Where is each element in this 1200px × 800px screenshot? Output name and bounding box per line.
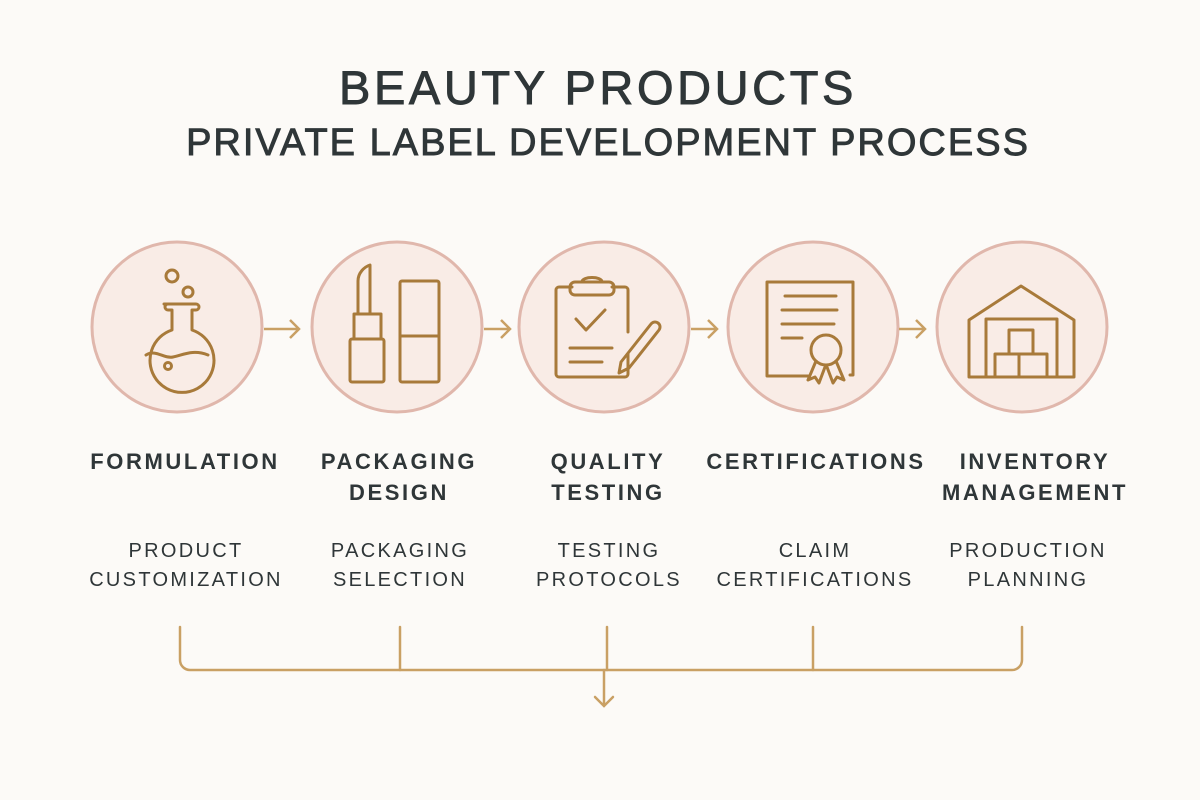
step descriptions xyxy=(89,540,1107,591)
step 2: packaging design xyxy=(312,242,482,412)
step 5: inventory management xyxy=(937,242,1107,412)
bracket with down arrow xyxy=(180,627,1022,706)
title xyxy=(186,61,1030,164)
step labels: PACKAGING xyxy=(321,449,477,474)
step labels: DESIGN xyxy=(349,480,449,505)
arrow 2 xyxy=(484,320,510,338)
step descriptions: PRODUCTION xyxy=(949,540,1107,562)
step descriptions: CUSTOMIZATION xyxy=(89,569,283,591)
step labels: FORMULATION xyxy=(90,449,280,474)
step labels: INVENTORY xyxy=(960,449,1110,474)
icon: warehouse xyxy=(969,286,1074,377)
arrow 4 xyxy=(899,320,925,338)
icon: flask xyxy=(146,270,214,392)
step 3: quality testing xyxy=(519,242,689,412)
step descriptions: TESTING xyxy=(558,540,660,562)
step labels xyxy=(90,449,1128,505)
step labels: MANAGEMENT xyxy=(942,480,1128,505)
step descriptions: PROTOCOLS xyxy=(536,569,682,591)
arrow 3 xyxy=(691,320,717,338)
step descriptions: PRODUCT xyxy=(128,540,244,562)
icon: certificate xyxy=(767,282,853,383)
step descriptions: CERTIFICATIONS xyxy=(716,569,914,591)
title: PRIVATE LABEL DEVELOPMENT PROCESS xyxy=(186,122,1030,164)
step labels: QUALITY xyxy=(551,449,665,474)
icon: lipstick and compact xyxy=(350,265,439,382)
step descriptions: PLANNING xyxy=(968,569,1088,591)
step labels: TESTING xyxy=(551,480,665,505)
step labels: CERTIFICATIONS xyxy=(706,449,926,474)
step descriptions: CLAIM xyxy=(779,540,851,562)
arrow 1 xyxy=(264,320,299,338)
step 1: formulation xyxy=(92,242,262,412)
step 4: certifications xyxy=(728,242,898,412)
step descriptions: SELECTION xyxy=(333,569,467,591)
title: BEAUTY PRODUCTS xyxy=(339,61,857,114)
step descriptions: PACKAGING xyxy=(331,540,469,562)
icon: clipboard xyxy=(556,278,660,377)
